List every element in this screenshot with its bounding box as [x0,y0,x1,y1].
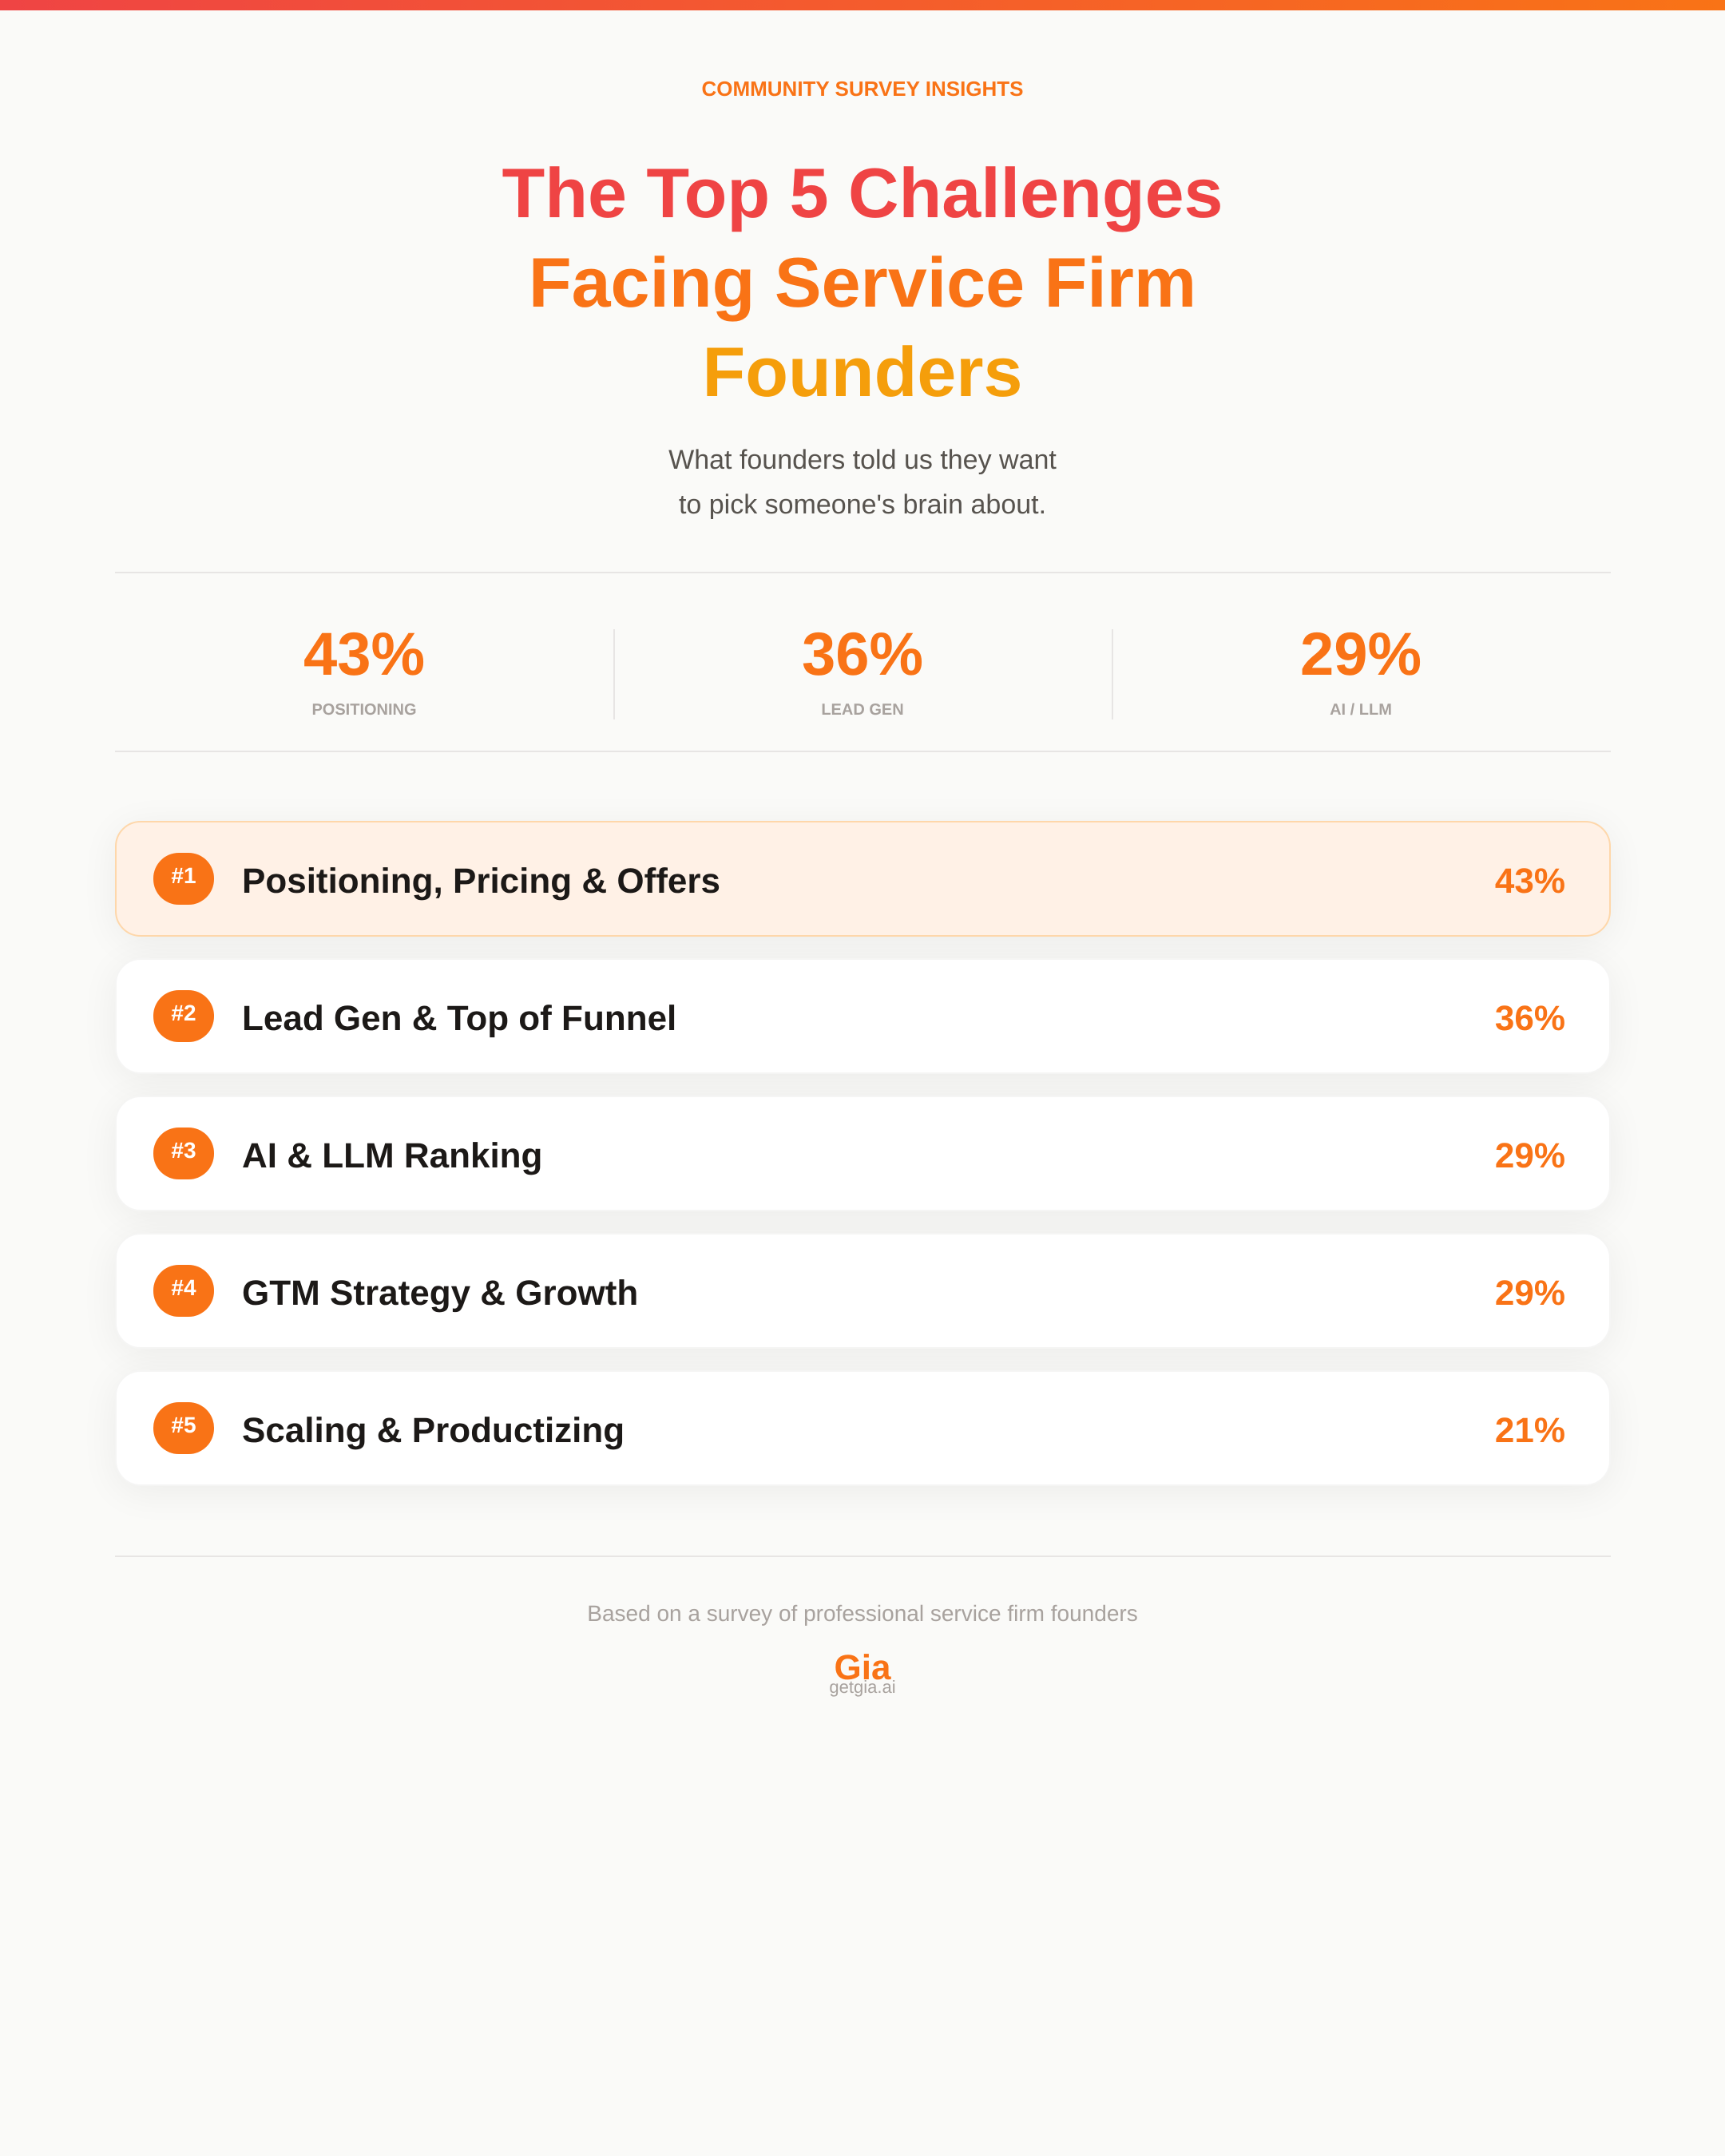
challenge name 4: GTM Strategy & Growth [242,1274,638,1313]
badge 4: #4 [171,1275,196,1300]
badge 2 [153,990,214,1042]
badge 1 [153,853,214,905]
percentage 1: 43% [1495,862,1565,901]
subtitle: to pick someone's brain about. [679,489,1046,520]
card: rank 5 [115,1370,1611,1486]
stats row [303,620,1422,719]
badge 2: #2 [171,1001,196,1025]
badge 4 [153,1265,214,1317]
challenge name 1: Positioning, Pricing & Offers [242,862,720,901]
title line 2: Facing Service Firm [529,243,1196,322]
title line 3: Founders [703,332,1022,411]
header [502,77,1223,520]
stat: lead gen: 36% [802,620,923,688]
challenge name 5: Scaling & Productizing [242,1411,625,1450]
badge 3 [153,1128,214,1179]
subtitle: What founders told us they want [668,445,1057,475]
stat: ai / llm [1300,620,1422,719]
eyebrow label: COMMUNITY SURVEY INSIGHTS [701,77,1024,101]
stat: positioning: POSITIONING [311,701,417,719]
stat: lead gen: LEAD GEN [821,701,904,719]
percentage 4: 29% [1495,1274,1565,1313]
card: rank 1 [115,821,1611,937]
stat: ai / llm: 29% [1300,620,1422,688]
source note: Based on a survey of professional service firm founders [587,1601,1138,1626]
card: rank 4 [115,1233,1611,1349]
stat: positioning [303,620,425,719]
badge 1: #1 [171,863,196,888]
badge 3: #3 [171,1138,196,1163]
challenge name 2: Lead Gen & Top of Funnel [242,999,676,1038]
badge 5 [153,1402,214,1454]
percentage 3: 29% [1495,1136,1565,1175]
title line 1: The Top 5 Challenges [502,153,1223,232]
card: rank 3 [115,1096,1611,1211]
percentage 5: 21% [1495,1411,1565,1450]
top gradient bar [0,0,1725,10]
brand name: Gia [835,1648,890,1687]
card: rank 2 [115,958,1611,1074]
challenge name 3: AI & LLM Ranking [242,1136,542,1175]
badge 5: #5 [171,1413,196,1437]
brand url: getgia.ai [829,1677,896,1697]
footer [587,1601,1138,1697]
subtitle [668,445,1057,520]
stat: positioning: 43% [303,620,425,688]
stat: ai / llm: AI / LLM [1330,701,1392,719]
percentage 2: 36% [1495,999,1565,1038]
stat: lead gen [802,620,923,719]
